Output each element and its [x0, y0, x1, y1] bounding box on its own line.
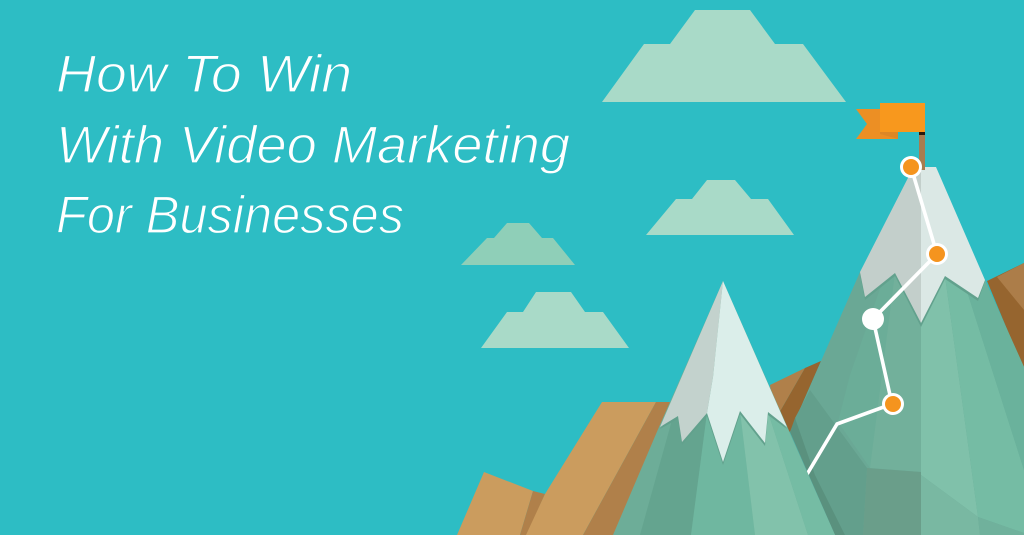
small mountain: [613, 281, 835, 535]
waypoint: white: [862, 308, 884, 330]
waypoint: upper: [926, 243, 948, 265]
large mountain: [790, 167, 1024, 535]
snow shadow: [860, 220, 985, 327]
waypoint: summit: [900, 156, 922, 178]
snow cap: [660, 281, 723, 442]
rocks: right brown cliff: [987, 263, 1024, 370]
cloud: top large: [602, 10, 846, 102]
cloud: small darker: [461, 223, 575, 265]
snow shadow: [660, 350, 787, 465]
route line with waypoints: [806, 156, 948, 476]
cloud: lower: [481, 292, 629, 348]
flag: [856, 103, 925, 170]
facets left: [795, 390, 867, 535]
waypoint: lower: [882, 393, 904, 415]
title: How To Win: [56, 45, 352, 104]
rocks: left brown cliffs: [457, 402, 675, 535]
rocks: centre brown cliff: [770, 361, 821, 432]
facets right: [921, 276, 978, 517]
snow cap: [860, 167, 921, 323]
title: For Businesses: [56, 186, 404, 245]
cloud: middle: [646, 180, 794, 235]
title: With Video Marketing: [56, 116, 571, 175]
title: [56, 45, 571, 245]
